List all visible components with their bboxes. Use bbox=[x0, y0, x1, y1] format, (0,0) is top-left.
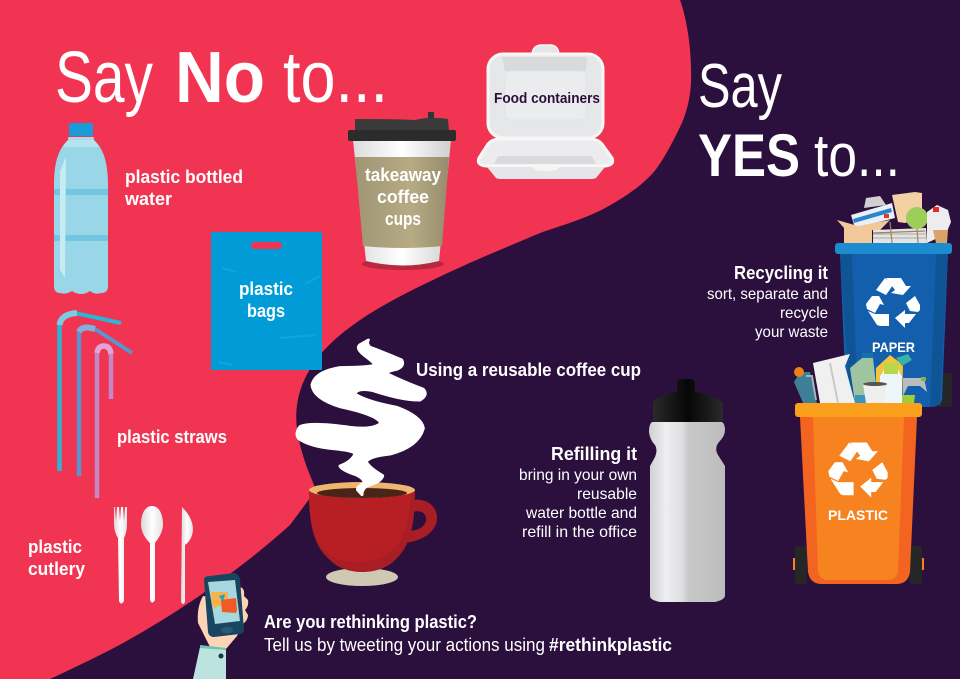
label: plastic bags bbox=[239, 279, 293, 321]
label: recycling it: recycle bbox=[780, 305, 828, 322]
label: refilling it: water bottle and bbox=[525, 505, 637, 522]
label: plastic cutlery: plastic bbox=[28, 537, 82, 557]
waste: spray bottle bbox=[902, 377, 927, 403]
icon: foam food container bbox=[478, 45, 613, 179]
label: recycling it: your waste bbox=[755, 324, 828, 341]
icon: reusable sports bottle bbox=[649, 379, 725, 602]
label: recycling it bbox=[707, 263, 828, 341]
icon: plastic straws bbox=[60, 313, 132, 498]
label: recycling it: sort, separate and bbox=[707, 286, 828, 303]
label: plastic straws: plastic straws bbox=[117, 427, 227, 447]
callout: are you rethinking plastic: #rethinkplastic bbox=[549, 635, 672, 655]
title: Say No to: No bbox=[175, 38, 265, 118]
icon: orange plastic recycling bin bbox=[793, 353, 927, 584]
title: Say YES to bbox=[698, 52, 900, 189]
waste: green bottle bbox=[850, 353, 878, 403]
icon: takeaway coffee cup bbox=[348, 112, 456, 270]
title: Say YES to: to... bbox=[814, 122, 900, 189]
waste: milk carton bbox=[927, 205, 951, 243]
label: takeaway coffee cups bbox=[365, 165, 441, 229]
icon: blue paper recycling bin: PAPER bbox=[872, 339, 915, 355]
label: plastic cutlery bbox=[28, 537, 85, 579]
label: plastic cutlery: cutlery bbox=[28, 559, 85, 579]
waste: white bottle bbox=[880, 363, 902, 403]
label: plastic bottled water bbox=[124, 167, 243, 209]
label: takeaway coffee cups: takeaway bbox=[365, 165, 441, 185]
callout: are you rethinking plastic: Are you rethinking plastic? bbox=[264, 612, 477, 632]
waste: plastic cup bbox=[863, 382, 887, 403]
icon: plastic bag bbox=[211, 232, 322, 370]
title: Say No to: Say bbox=[55, 38, 153, 118]
label: refilling it bbox=[519, 444, 637, 541]
label: plastic bags: bags bbox=[247, 301, 285, 321]
icon: red coffee cup with steam bbox=[297, 340, 437, 586]
waste: grey-blue bottle bbox=[794, 367, 817, 403]
label: recycling it: Recycling it bbox=[734, 263, 828, 283]
label: plastic bottled water: plastic bottled bbox=[125, 167, 243, 187]
icon: plastic water bottle bbox=[54, 123, 108, 294]
waste: newspapers bbox=[873, 222, 927, 243]
title: Say No to bbox=[55, 38, 388, 118]
label: refilling it: reusable bbox=[577, 486, 637, 503]
label: refilling it: bring in your own bbox=[519, 467, 637, 484]
label: food containers: Food containers bbox=[494, 90, 600, 107]
icon: plastic cutlery bbox=[114, 506, 193, 604]
waste: white jug bbox=[813, 354, 855, 403]
title: Say No to: to... bbox=[283, 38, 388, 118]
title: Say YES to: YES bbox=[698, 122, 800, 189]
icon: blue paper recycling bin bbox=[835, 192, 952, 407]
waste: paper bag bbox=[892, 192, 922, 223]
label: takeaway coffee cups: coffee bbox=[377, 187, 429, 207]
waste: lettuce bbox=[906, 207, 928, 229]
icon: orange plastic recycling bin: PLASTIC bbox=[828, 507, 888, 523]
icon: smartphone in hand bbox=[193, 573, 248, 679]
label: using a reusable coffee cup: Using a reusable coffee cup bbox=[416, 360, 641, 380]
label: takeaway coffee cups: cups bbox=[385, 209, 421, 229]
label: plastic bags: plastic bbox=[239, 279, 293, 299]
waste: yellow bottle bbox=[876, 354, 912, 403]
waste: printed paper bbox=[851, 196, 895, 228]
label: plastic bottled water: water bbox=[124, 189, 172, 209]
label: refilling it: Refilling it bbox=[551, 444, 637, 464]
callout: are you rethinking plastic: Tell us by tweeting your actions using bbox=[264, 635, 545, 655]
waste: cardboard box bbox=[837, 220, 890, 243]
callout: are you rethinking plastic bbox=[264, 612, 672, 655]
title: Say YES to: Say bbox=[698, 52, 782, 121]
label: refilling it: refill in the office bbox=[522, 524, 637, 541]
